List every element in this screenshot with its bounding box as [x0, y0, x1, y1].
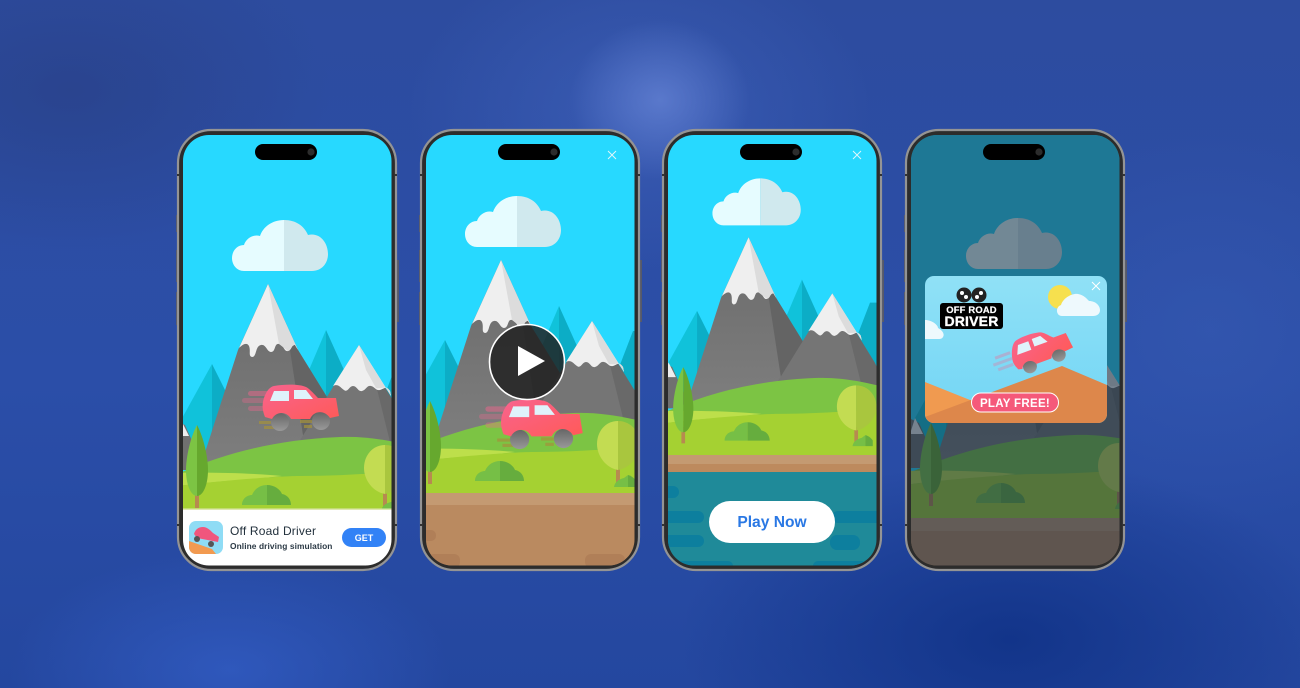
cloud	[966, 218, 1062, 269]
PLAY FREE button	[972, 393, 1058, 412]
phone 2: rewarded video ad	[419, 128, 642, 572]
scene: mountains and hills	[668, 135, 876, 455]
phone 4: interstitial popup ad	[904, 128, 1127, 572]
sun	[1048, 285, 1072, 309]
scene: mountains and hills	[426, 135, 634, 493]
water	[668, 472, 876, 566]
game logo	[940, 288, 1003, 329]
game logo: DRIVER	[944, 313, 999, 329]
phone 3: playable ad	[661, 128, 884, 572]
GET button: GET	[355, 533, 374, 543]
scene: mountains and hills	[183, 135, 392, 508]
play button	[490, 324, 564, 400]
Play Now button: Play Now	[737, 514, 808, 531]
banner ad bar	[183, 508, 392, 566]
car	[479, 400, 583, 449]
dim overlay	[911, 134, 1120, 566]
close icon	[853, 151, 861, 159]
Play Now button	[709, 501, 835, 543]
close icon	[608, 151, 616, 159]
close icon	[1092, 282, 1100, 290]
app description: Online driving simulation	[230, 541, 333, 551]
dirt bank	[668, 455, 877, 472]
scene: mountains and hills	[911, 135, 1120, 518]
cloud	[232, 220, 328, 271]
app name: Off Road Driver	[230, 524, 316, 538]
app icon	[189, 521, 223, 554]
cloud	[465, 196, 561, 247]
ad format phones	[176, 128, 1127, 572]
PLAY FREE button: PLAY FREE!	[980, 398, 1050, 410]
cloud left	[925, 320, 944, 339]
cloud	[712, 178, 801, 225]
car	[242, 385, 339, 431]
GET button	[342, 528, 386, 547]
car	[988, 322, 1076, 384]
dirt road	[420, 493, 635, 568]
dirt road	[911, 518, 1120, 566]
hills	[925, 382, 970, 423]
phone 1: banner ad	[176, 128, 399, 572]
popup ad card	[925, 276, 1107, 423]
game logo: OFF ROAD	[946, 304, 997, 315]
cloud right	[1057, 294, 1100, 316]
